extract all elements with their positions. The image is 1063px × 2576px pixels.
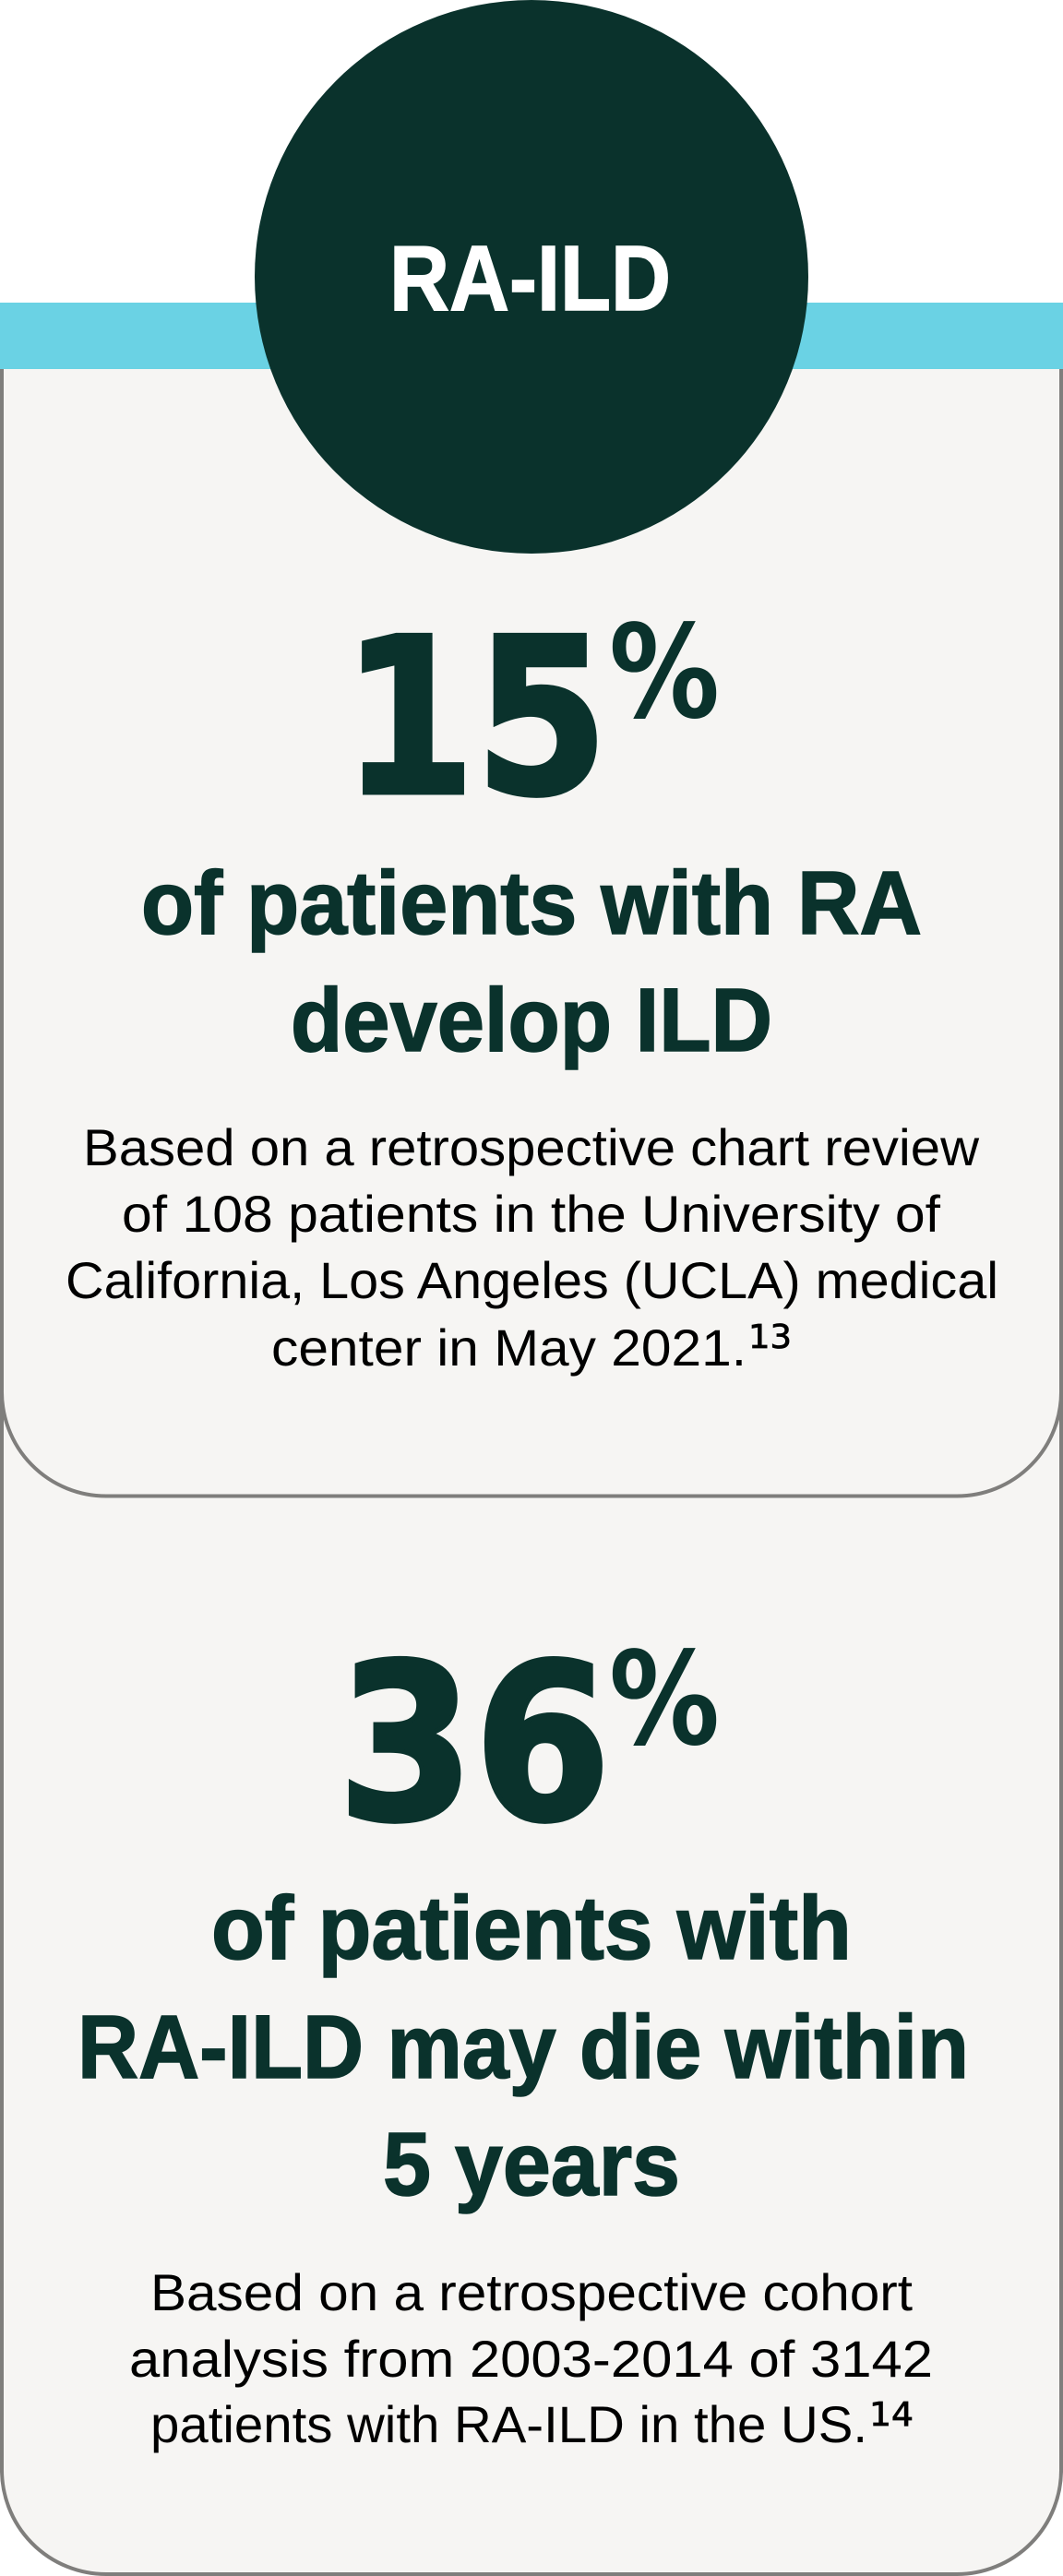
body text: UCLA chart review: center in May 2021. bbox=[271, 1318, 746, 1377]
heading: of patients with RA develop ILD: of patients with RA bbox=[141, 853, 922, 953]
body text: US cohort analysis: analysis from 2003-2014 of 3142 bbox=[129, 2330, 933, 2388]
body text: UCLA chart review bbox=[66, 1118, 998, 1377]
header band bbox=[0, 303, 1063, 369]
body text: UCLA chart review: Based on a retrospective chart review bbox=[83, 1118, 980, 1176]
big number 15%: % bbox=[609, 598, 720, 748]
heading: of patients with RA develop ILD bbox=[141, 853, 922, 1070]
big number 36%: 36 bbox=[338, 1619, 611, 1870]
body text: US cohort analysis: 14 bbox=[869, 2396, 914, 2434]
body text: US cohort analysis bbox=[129, 2263, 933, 2453]
body text: UCLA chart review: California, Los Angeles (UCLA) medical bbox=[66, 1251, 998, 1309]
big number 36%: % bbox=[609, 1625, 720, 1775]
heading: of patients with RA-ILD may die within 5 years: RA-ILD may die within bbox=[78, 1997, 969, 2097]
panel: upper card outline bbox=[2, 365, 1061, 1497]
body text: US cohort analysis: Based on a retrospective cohort bbox=[150, 2263, 913, 2321]
heading: of patients with RA develop ILD: develop ILD bbox=[291, 970, 772, 1070]
stat block: 15 percent bbox=[66, 593, 998, 1377]
heading: of patients with RA-ILD may die within 5 years: 5 years bbox=[383, 2114, 680, 2214]
big number 15%: 15 bbox=[342, 593, 608, 844]
heading: of patients with RA-ILD may die within 5 years bbox=[78, 1878, 969, 2214]
heading: of patients with RA-ILD may die within 5 years: of patients with bbox=[211, 1878, 852, 1978]
body text: US cohort analysis: patients with RA-ILD in the US. bbox=[150, 2395, 867, 2453]
body text: UCLA chart review: 13 bbox=[748, 1318, 792, 1356]
header circle badge bbox=[255, 0, 808, 554]
badge title: RA-ILD bbox=[389, 227, 671, 330]
stat block: 36 percent bbox=[78, 1619, 969, 2453]
body text: UCLA chart review: of 108 patients in the University of bbox=[122, 1185, 940, 1243]
